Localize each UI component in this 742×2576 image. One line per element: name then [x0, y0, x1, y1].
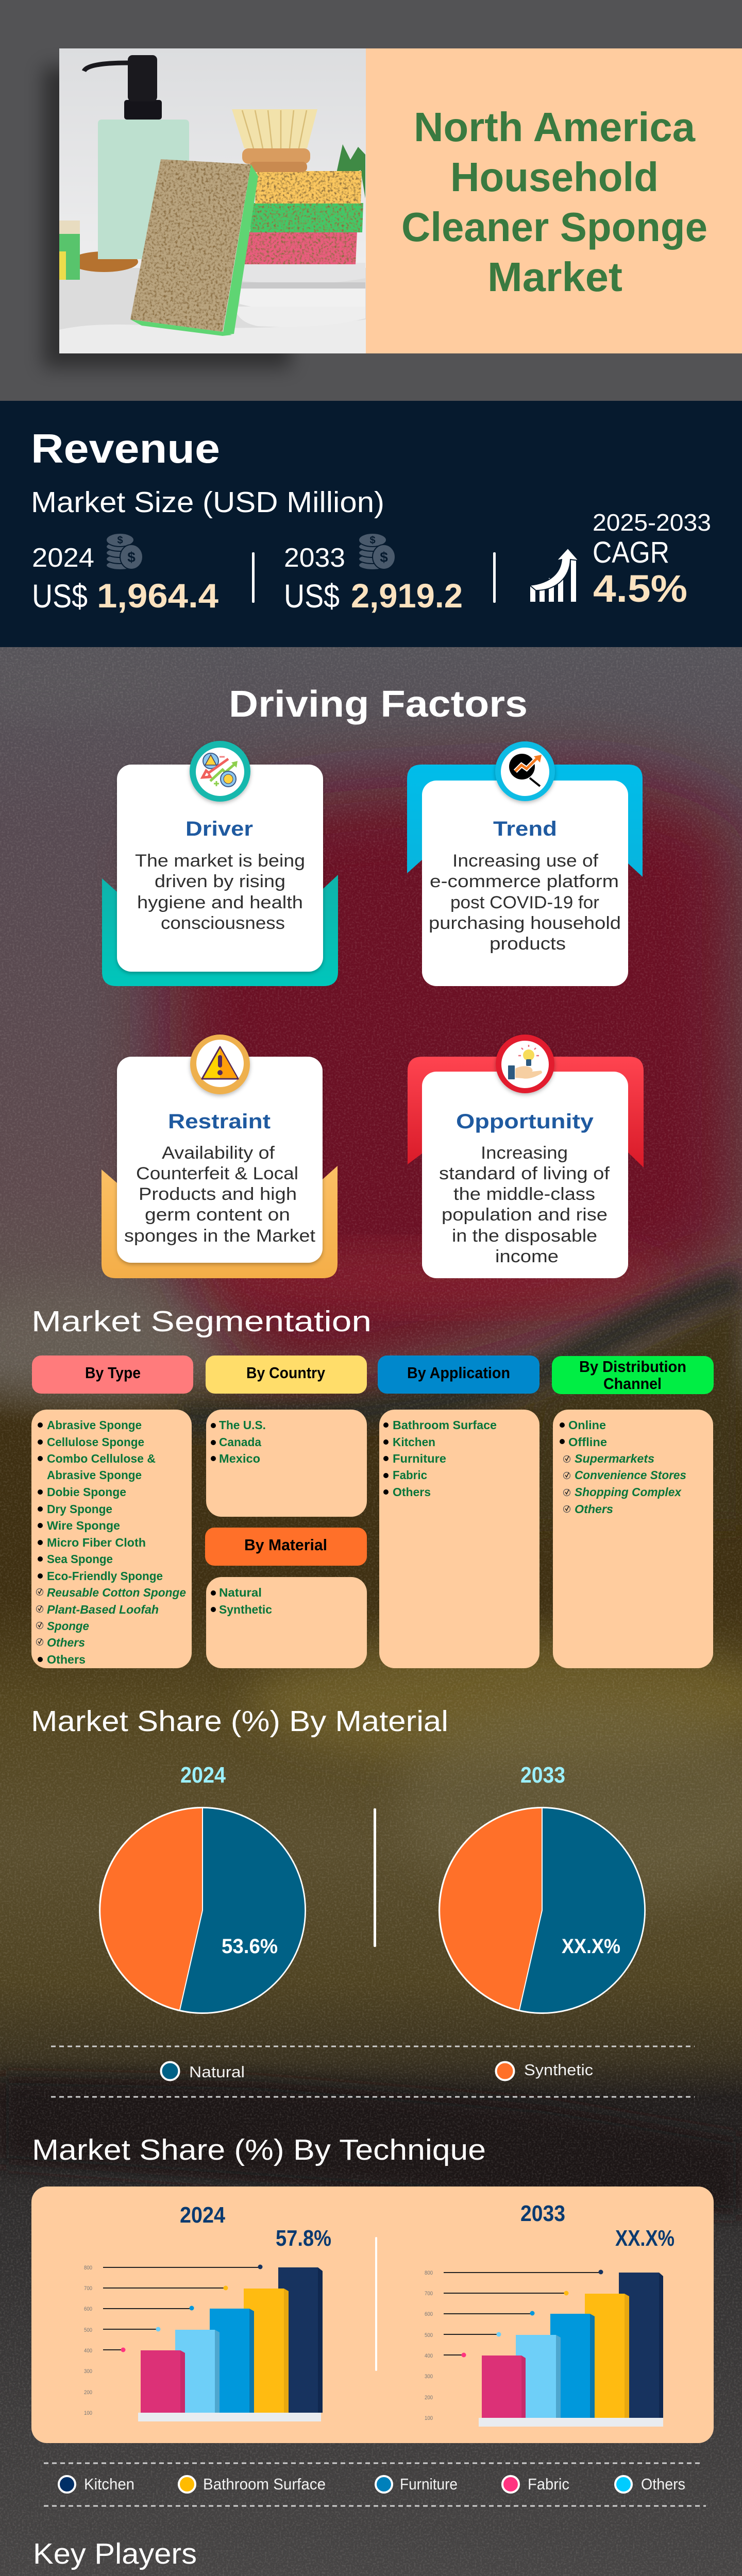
segment column: by distribution channel: Supermarkets	[575, 1452, 654, 1465]
segment column: by distribution channel: Online	[568, 1418, 606, 1432]
driver text: consciousness	[161, 913, 285, 933]
divider	[374, 1808, 376, 1947]
segment column: by application: Furniture	[393, 1452, 446, 1465]
hero title: Market	[487, 254, 622, 300]
segment column: by type: Sponge	[47, 1619, 89, 1633]
segment column: by application: By Application	[407, 1364, 510, 1382]
pie chart 2024: 53.6%	[222, 1935, 278, 1958]
header: by country	[206, 1355, 367, 1394]
card: opportunity	[408, 1035, 644, 1278]
bar chart 2033: 600	[425, 2311, 433, 2317]
header: by material	[205, 1528, 367, 1566]
segment column: by distribution channel: Channel	[603, 1375, 662, 1393]
segment column: by country and material: Natural	[219, 1586, 262, 1599]
driver text	[135, 851, 305, 933]
technique legend: Furniture	[400, 2475, 458, 2493]
restraint text: Products and high	[139, 1184, 297, 1204]
hero title: North America	[414, 104, 696, 150]
restraint text: Counterfeit & Local	[136, 1164, 298, 1183]
pie chart 2033: 2033	[520, 1762, 565, 1788]
CAGR stat: CAGR	[593, 536, 669, 569]
technique legend: Others	[641, 2475, 685, 2493]
CAGR stat	[593, 509, 711, 610]
opportunity text: the middle-class	[453, 1184, 595, 1204]
icon: driver	[190, 741, 250, 802]
segment column: by distribution channel: By Distribution	[579, 1358, 686, 1376]
segment column: by type: By Type	[85, 1364, 141, 1382]
hero title: Cleaner Sponge	[401, 204, 707, 250]
segment column: by application: Bathroom Surface	[393, 1418, 497, 1432]
segment column: by country and material: By Country	[246, 1364, 326, 1382]
bar chart 2024: 700	[84, 2285, 92, 2292]
driving factors heading: Driving Factors	[229, 684, 528, 725]
card: driver	[102, 741, 338, 986]
icon: coins 2033	[359, 533, 395, 570]
technique legend	[44, 2463, 706, 2506]
restraint text	[124, 1143, 316, 1246]
stat 2024: 2024	[32, 543, 94, 573]
segment column: by type: Dobie Sponge	[47, 1485, 126, 1499]
hero title panel	[366, 48, 742, 353]
trend title: Trend	[493, 818, 557, 840]
segment column: by distribution channel	[552, 1356, 714, 1668]
trend text: purchasing household	[429, 913, 621, 933]
segment column: by type: Wire Sponge	[47, 1519, 120, 1532]
bar chart 2024: 800	[84, 2265, 92, 2271]
bar chart 2024: 600	[84, 2306, 92, 2312]
hero title	[401, 104, 707, 300]
bar chart 2024: 500	[84, 2327, 92, 2333]
segment column: by type: Abrasive Sponge	[47, 1418, 142, 1432]
segment column: by country and material: Mexico	[219, 1452, 260, 1465]
opportunity text: in the disposable	[452, 1226, 597, 1246]
panel: type list	[31, 1410, 192, 1668]
pie chart 2024	[99, 1762, 306, 2014]
bar chart 2033: 200	[425, 2395, 433, 2401]
restraint text: sponges in the Market	[124, 1226, 316, 1246]
bar chart 2033: 400	[425, 2353, 433, 2359]
pie chart 2033	[439, 1762, 646, 2014]
stat 2033: US$	[284, 578, 340, 615]
hero panel	[43, 48, 742, 368]
stat 2024: 1,964.4	[97, 577, 218, 615]
market segmentation heading: Market Segmentation	[31, 1305, 372, 1338]
icon: growth chart arrow	[530, 548, 579, 602]
bar chart 2033: XX.X%	[615, 2226, 674, 2251]
segment column: by type: Eco-Friendly Sponge	[47, 1569, 163, 1583]
segment column: by type: Sea Sponge	[47, 1552, 113, 1566]
opportunity text: income	[495, 1247, 559, 1266]
bar chart 2033: 300	[425, 2374, 433, 2380]
bar chart 2033: 800	[425, 2270, 433, 2276]
bar chart 2024: 100	[84, 2410, 92, 2416]
market size subtitle: Market Size (USD Million)	[31, 486, 384, 519]
opportunity text: population and rise	[442, 1205, 608, 1225]
bar chart 2033: 100	[425, 2415, 433, 2421]
hero photo of sponges	[59, 48, 366, 353]
pie chart 2024: 2024	[180, 1762, 226, 1788]
trend text: post COVID-19 for	[450, 893, 599, 912]
CAGR stat: 4.5%	[593, 567, 687, 610]
bar chart 2033: 700	[425, 2291, 433, 2297]
segment column: by distribution channel: Offline	[568, 1435, 607, 1449]
bar chart 2033: 2033	[520, 2201, 565, 2226]
segment column: by type: Combo Cellulose &	[47, 1452, 156, 1465]
card: trend	[407, 741, 643, 986]
header: by type	[32, 1355, 193, 1394]
segment column: by type: Reusable Cotton Sponge	[47, 1586, 186, 1599]
panel: technique charts	[31, 2187, 714, 2443]
stat 2033: 2033	[284, 543, 345, 573]
divider	[375, 2237, 377, 2371]
bar chart 2033	[425, 2201, 674, 2427]
segment column: by application: Kitchen	[393, 1435, 435, 1449]
icon: coins 2024: $	[127, 549, 136, 565]
stat 2024: US$	[32, 578, 88, 615]
divider	[493, 552, 496, 603]
bar chart 2024: 400	[84, 2348, 92, 2354]
CAGR stat: 2025-2033	[593, 509, 711, 536]
segment column: by application	[378, 1355, 539, 1668]
panel: material list	[206, 1577, 367, 1668]
trend text: e-commerce platform	[430, 872, 619, 891]
segment column: by distribution channel: Shopping Complex	[575, 1485, 682, 1499]
material legend: Synthetic	[524, 2061, 593, 2079]
header: by distribution channel	[552, 1356, 714, 1394]
material legend: Natural	[189, 2063, 245, 2081]
segment column: by type: Others	[47, 1636, 85, 1649]
technique legend: Fabric	[528, 2475, 569, 2493]
driver title: Driver	[185, 818, 253, 840]
segment column: by type: Plant-Based Loofah	[47, 1603, 159, 1616]
pie chart 2033: XX.X%	[562, 1935, 620, 1958]
segment column: by country and material: Canada	[219, 1435, 261, 1449]
driver text: The market is being	[135, 851, 305, 871]
page background: hero area	[0, 0, 742, 401]
card: restraint	[102, 1035, 338, 1278]
segment column: by type	[31, 1355, 193, 1668]
icon: coins 2033: $	[380, 549, 388, 565]
opportunity text	[439, 1143, 610, 1266]
hero shadow	[43, 67, 291, 368]
bar chart 2024	[84, 2202, 331, 2421]
revenue heading: Revenue	[31, 426, 220, 471]
divider	[252, 552, 255, 603]
driver text: hygiene and health	[137, 893, 303, 912]
icon: coins 2024: $	[117, 535, 123, 546]
segment column: by type: Cellulose Sponge	[47, 1435, 144, 1449]
opportunity text: standard of living of	[439, 1164, 610, 1183]
textured sponge background	[0, 647, 742, 2576]
panel: application list	[379, 1410, 539, 1668]
restraint text: germ content on	[145, 1205, 290, 1225]
technique legend: Kitchen	[84, 2475, 134, 2493]
stat 2033	[284, 533, 463, 615]
material legend	[51, 2046, 695, 2097]
segment column: by type: Micro Fiber Cloth	[47, 1536, 146, 1549]
key players heading: Key Players	[33, 2537, 197, 2570]
opportunity title: Opportunity	[456, 1110, 594, 1133]
segment column: by country and material	[205, 1355, 367, 1668]
trend text	[429, 851, 621, 954]
driver text: driven by rising	[155, 872, 285, 891]
trend text: products	[490, 934, 566, 954]
bar chart 2033: 500	[425, 2332, 433, 2338]
segment column: by type: Others	[47, 1653, 86, 1666]
segment column: by distribution channel: Convenience Stores	[575, 1468, 686, 1482]
segment column: by application: Fabric	[393, 1468, 427, 1482]
technique legend: Bathroom Surface	[203, 2475, 326, 2493]
segment column: by country and material: The U.S.	[219, 1418, 266, 1432]
segment column: by country and material: Synthetic	[219, 1603, 272, 1616]
bar chart 2024: 2024	[180, 2202, 225, 2228]
opportunity text: Increasing	[481, 1143, 568, 1163]
market share by technique heading: Market Share (%) By Technique	[32, 2133, 486, 2166]
market share by material heading: Market Share (%) By Material	[31, 1705, 448, 1738]
icon: opportunity	[496, 1035, 554, 1093]
header: by application	[378, 1355, 539, 1394]
trend text: Increasing use of	[452, 851, 599, 871]
restraint title: Restraint	[168, 1110, 271, 1133]
panel: country list	[206, 1410, 367, 1517]
segment column: by type: Dry Sponge	[47, 1502, 112, 1516]
bar chart 2024: 300	[84, 2368, 92, 2375]
segment column: by application: Others	[393, 1485, 431, 1499]
hero title: Household	[450, 154, 659, 200]
restraint text: Availability of	[162, 1143, 275, 1163]
revenue band	[0, 401, 742, 647]
bar chart 2024: 57.8%	[276, 2226, 331, 2251]
icon: trend	[495, 741, 555, 801]
icon: coins 2033: $	[369, 535, 376, 546]
panel: distribution list	[553, 1410, 713, 1668]
stat 2033: 2,919.2	[351, 577, 463, 615]
segment column: by country and material: By Material	[244, 1536, 327, 1554]
segment column: by type: Abrasive Sponge	[47, 1468, 142, 1482]
segment column: by distribution channel: Others	[575, 1502, 613, 1516]
stat 2024	[32, 533, 218, 615]
icon: coins 2024	[106, 533, 143, 570]
bar chart 2024: 200	[84, 2389, 92, 2396]
icon: restraint	[190, 1035, 250, 1094]
